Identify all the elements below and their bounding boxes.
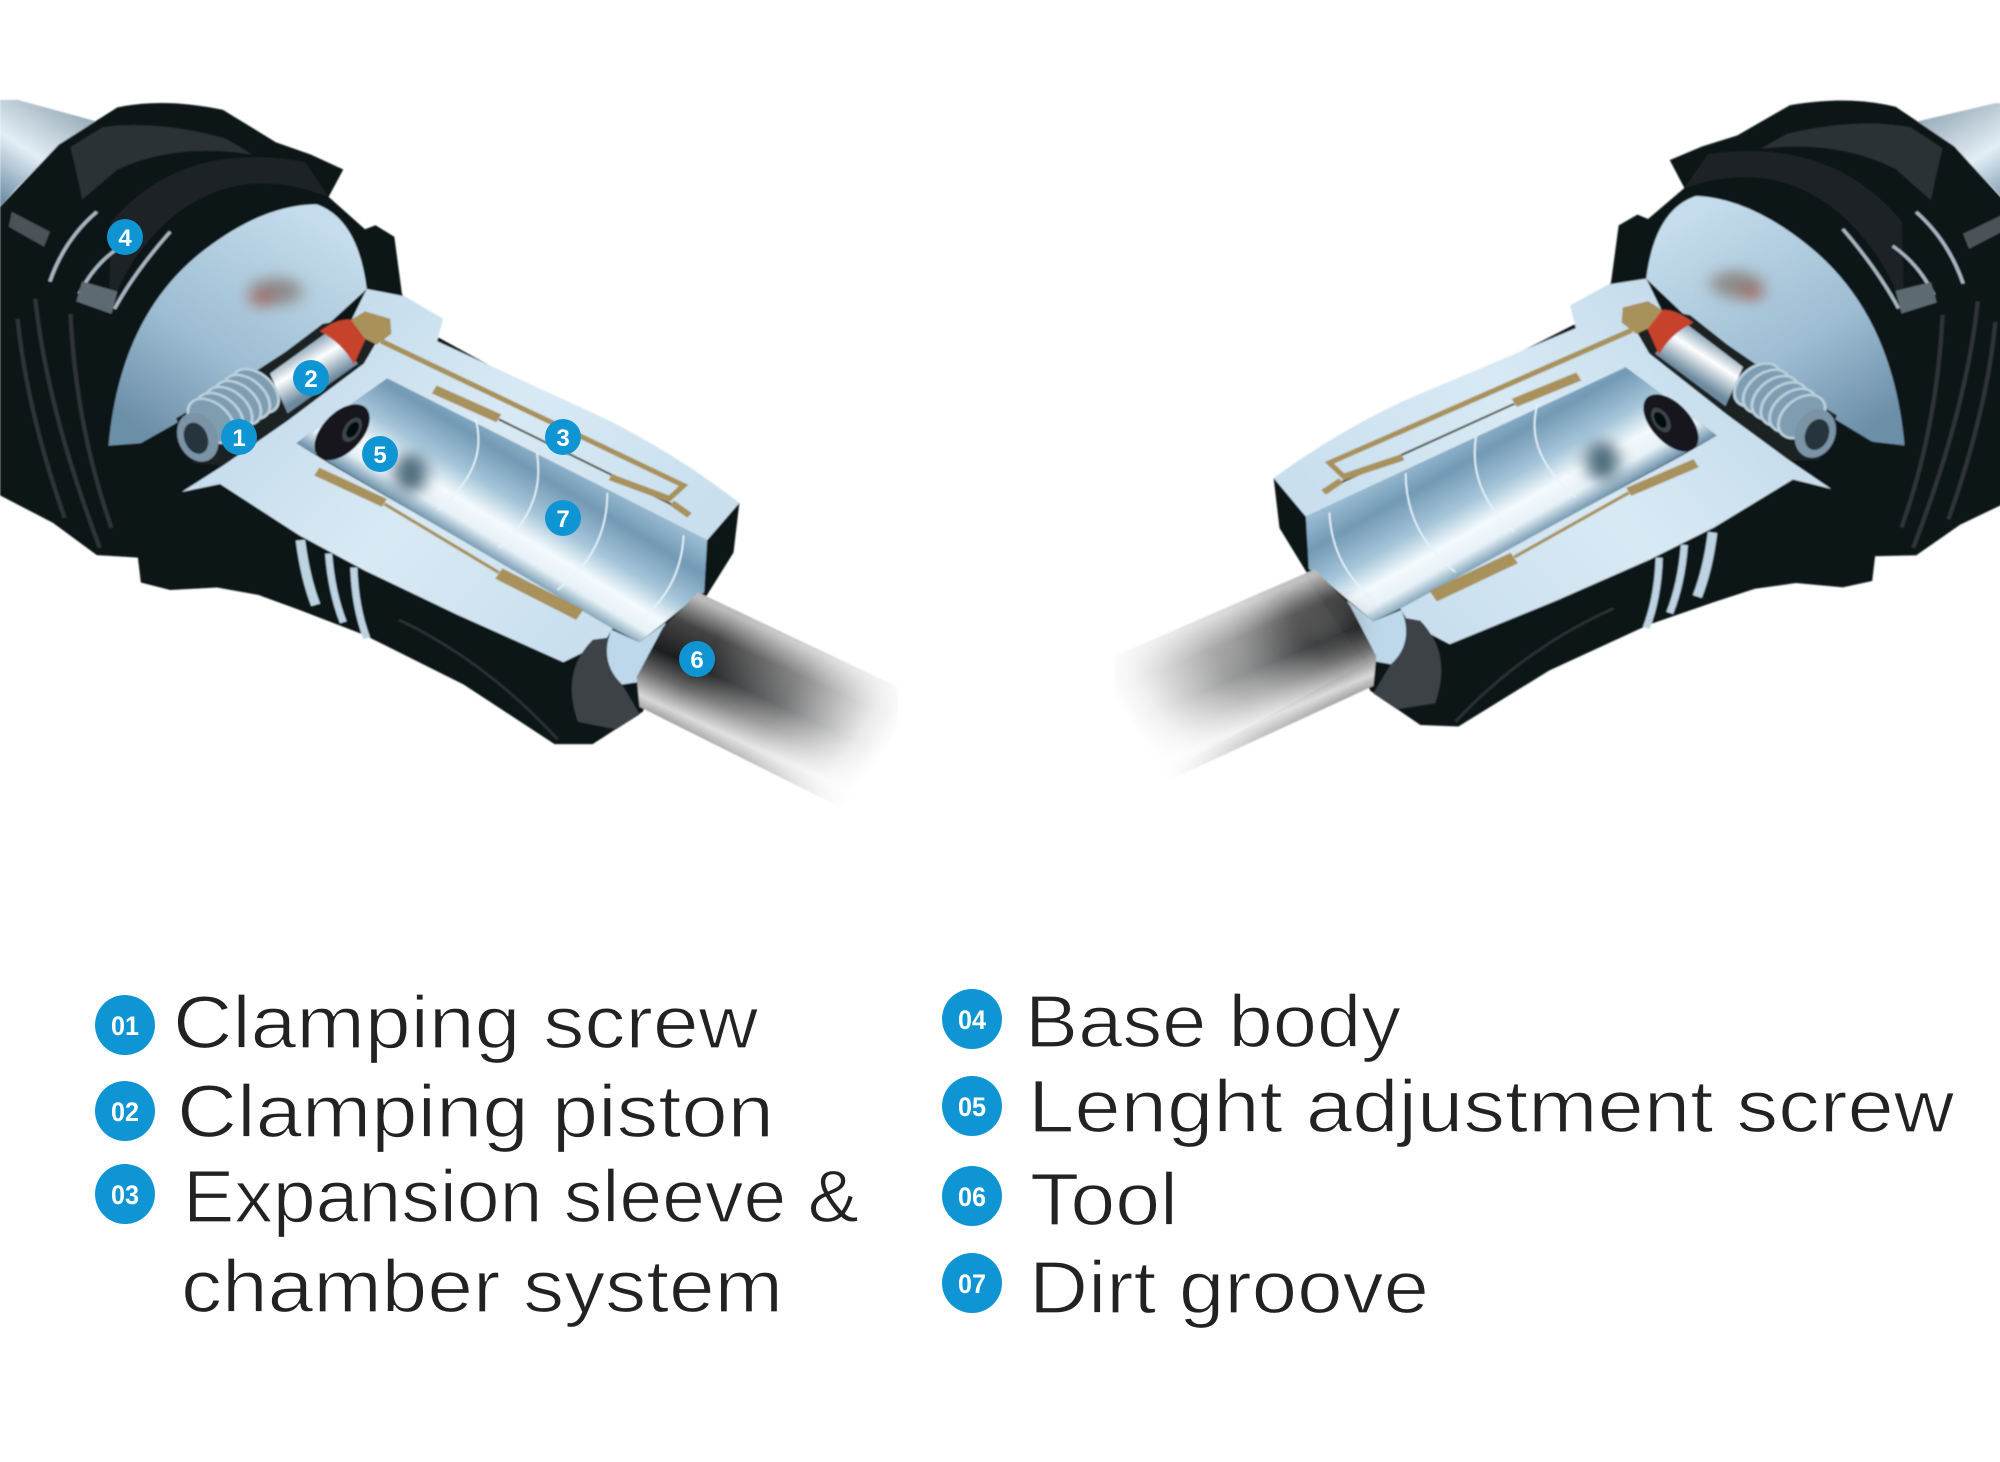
illustration: right tool holder cutaway [1109, 69, 2000, 845]
legend item 07: Dirt groove [1029, 1246, 1429, 1329]
lower gold chamber [317, 472, 580, 615]
marker 5 [362, 436, 398, 472]
right shaft lightening [1110, 570, 1365, 803]
marker 4 [107, 219, 143, 255]
upper gold chamber [381, 341, 689, 515]
marker 3: 3 [556, 425, 570, 452]
legend item 02: 02 [111, 1097, 139, 1127]
legend item 03: chamber system [181, 1245, 783, 1328]
legend item 07: 07 [958, 1269, 986, 1299]
sleeve highlights [399, 620, 557, 739]
body rings [300, 540, 367, 638]
back disc [109, 204, 367, 446]
legend item 05: Lenght adjustment screw [1028, 1065, 1955, 1148]
clamping screw threads [178, 362, 288, 450]
shaft blemish on right tool [1290, 608, 1354, 642]
screw cavity [176, 319, 376, 466]
marker 7 [545, 500, 581, 536]
marker 6 [679, 641, 715, 677]
cut face [182, 289, 739, 662]
marker 1: 1 [232, 425, 246, 452]
end ring [572, 637, 640, 729]
legend item 05: 05 [958, 1092, 986, 1122]
marker 1 [221, 419, 257, 455]
marker 5: 5 [373, 442, 387, 469]
adjustment screw [303, 396, 381, 469]
legend item 03: 03 [111, 1180, 139, 1210]
legend item 02: Clamping piston [177, 1070, 774, 1153]
shank [0, 100, 100, 207]
legend item 06: Tool [1030, 1158, 1178, 1241]
legend item 03 [95, 1155, 859, 1328]
bore shadow [394, 453, 427, 493]
marker 4: 4 [118, 225, 132, 252]
flange highlights [9, 125, 329, 548]
legend item 03: Expansion sleeve & [183, 1155, 859, 1238]
legend item 06: 06 [958, 1182, 986, 1212]
legend item 04: 04 [958, 1005, 986, 1035]
piston [270, 331, 358, 413]
marker 2 [293, 360, 329, 396]
gold head [351, 311, 391, 345]
legend item 06 [942, 1158, 1178, 1241]
smudge on disc [249, 278, 302, 306]
marker 2: 2 [304, 366, 318, 393]
bore arcs [437, 418, 684, 625]
piston red seal [320, 320, 367, 365]
illustration: left tool holder cutaway [0, 100, 904, 841]
bore [296, 378, 707, 642]
marker 3 [545, 419, 581, 455]
legend item 01: Clamping screw [173, 981, 759, 1064]
legend item 01: 01 [111, 1011, 139, 1041]
marker 6: 6 [690, 647, 704, 674]
shaft fade [634, 590, 904, 841]
marker 7: 7 [556, 506, 570, 533]
shaft [637, 592, 898, 836]
holder body [0, 103, 739, 744]
inner lip [607, 622, 666, 684]
legend item 04: Base body [1025, 980, 1401, 1063]
screw head socket [171, 409, 225, 466]
base body slots [50, 212, 170, 314]
